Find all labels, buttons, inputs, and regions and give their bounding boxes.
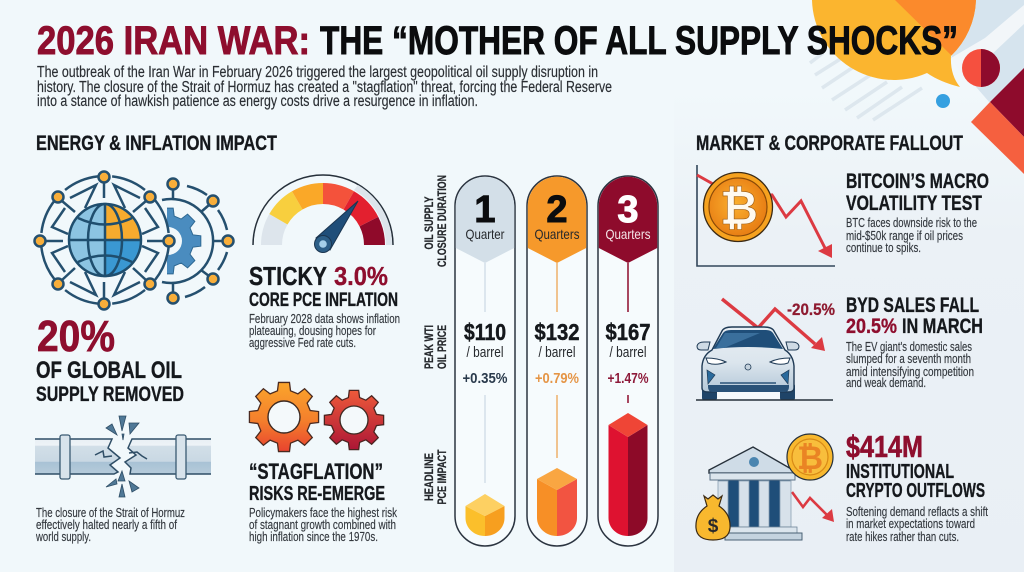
icon: car with falling sales arrow: -20.5% — [787, 300, 835, 319]
stat: 20 percent of global oil supply removed — [36, 312, 184, 406]
row labels: PCE IMPACT — [437, 449, 449, 505]
scenario pill: 1 quarter: Quarter — [466, 226, 505, 242]
scenario pill: 1 quarter — [455, 176, 515, 546]
scenario pill: 1 quarter: +0.35% — [462, 371, 508, 387]
text: institutional crypto outflows: $414M — [846, 429, 923, 464]
title — [37, 19, 958, 63]
text: institutional crypto outflows: in market expectations toward — [846, 516, 975, 531]
icon: bank with bitcoin and money bag — [696, 434, 834, 540]
text: byd sales fall: slumped for a seventh month — [846, 351, 971, 366]
text: strait of hormuz: effectively halted nearly a fifth of — [36, 517, 177, 532]
stat: sticky core PCE inflation: 3.0% — [334, 261, 388, 291]
icon: stagflation gears — [249, 382, 384, 452]
scenario pill: 3 quarters: / barrel — [610, 345, 646, 361]
stat: sticky core PCE inflation: February 2028 data shows inflation — [249, 311, 400, 326]
intro paragraph: The outbreak of the Iran War in February 2026 triggered the largest geopolitical oil supply disruption in — [37, 64, 598, 81]
scenario pill: 1 quarter: 1 — [474, 189, 496, 231]
text: strait of hormuz: The closure of the Strait of Hormuz — [36, 505, 185, 520]
text: byd sales fall: amid intensifying competition — [846, 364, 974, 379]
text: bitcoin macro volatility test: continue to spiks. — [846, 240, 921, 255]
stat: stagflation risks re-emerge: “STAGFLATION” — [249, 459, 383, 484]
text: byd sales fall: and weak demand. — [846, 375, 926, 390]
stat: stagflation risks re-emerge — [249, 459, 397, 544]
heading: energy and inflation impact: ENERGY & INFLATION IMPACT — [36, 132, 277, 155]
scenario pill: 3 quarters: $167 — [606, 319, 650, 345]
title: 2026 IRAN WAR: — [37, 19, 310, 63]
scenario pill: 3 quarters: 3 — [617, 189, 639, 231]
stat: sticky core PCE inflation: aggressive Fed rate cuts. — [249, 335, 356, 350]
decorative corner shapes — [810, 0, 1024, 174]
scenario pill: 3 quarters — [598, 176, 658, 546]
scenario pill: 2 quarters: $132 — [534, 319, 580, 345]
stat: 20 percent of global oil supply removed: OF GLOBAL OIL — [36, 357, 182, 384]
stat: sticky core PCE inflation: CORE PCE INFLATION — [249, 290, 398, 311]
scenario pill: 2 quarters: +0.79% — [535, 371, 579, 387]
intro paragraph: into a stance of hawkish patience as energy costs drive a resurgence in inflation. — [37, 93, 478, 110]
scenario pill: 1 quarter: / barrel — [466, 345, 504, 361]
text: bitcoin macro volatility test: VOLATILITY TEST — [846, 192, 982, 215]
scenario pill: 3 quarters: Quarters — [606, 226, 650, 242]
intro paragraph: history. The closure of the Strait of Hormuz has created a "stagflation" threat, forcing the Federal Reserve — [37, 79, 612, 96]
row labels: PEAK WTI — [424, 325, 436, 369]
text: bitcoin macro volatility test: BTC faces downside risk to the — [846, 215, 977, 230]
icon: bitcoin falling chart — [697, 165, 835, 266]
icon: car with falling sales arrow — [696, 299, 835, 400]
scenario pill: 2 quarters: 2 — [546, 189, 568, 231]
icon: inflation gauge — [253, 175, 393, 252]
row labels — [424, 175, 449, 504]
scenario pill: 2 quarters: Quarters — [534, 226, 580, 242]
icon: broken pipeline — [35, 416, 211, 497]
icon: bank with bitcoin and money bag: $ — [708, 516, 719, 537]
icon: bitcoin falling chart: ₿ — [720, 181, 758, 234]
row labels: OIL SUPPLY — [424, 196, 436, 250]
text: byd sales fall: 20.5% — [846, 315, 897, 338]
stat: sticky core PCE inflation — [249, 261, 400, 350]
stat: 20 percent of global oil supply removed: 20% — [37, 312, 115, 361]
stat: stagflation risks re-emerge: high inflation since the 1970s. — [249, 529, 378, 544]
stat: sticky core PCE inflation: plateauing, dousing hopes for — [249, 323, 376, 338]
scenario pill: 2 quarters: / barrel — [538, 345, 576, 361]
scenario pill: 3 quarters: +1.47% — [608, 371, 649, 387]
icon: globe and gear network — [34, 172, 234, 310]
text: institutional crypto outflows: rate hikes rather than cuts. — [846, 529, 959, 544]
text: institutional crypto outflows: INSTITUTIONAL — [846, 461, 954, 483]
row labels: HEADLINE — [424, 453, 436, 501]
icon: bank with bitcoin and money bag: ₿ — [797, 440, 823, 476]
text: strait of hormuz: world supply. — [35, 529, 91, 544]
text: byd sales fall: IN MARCH — [902, 315, 983, 338]
stat: 20 percent of global oil supply removed: SUPPLY REMOVED — [36, 383, 184, 406]
right column background panel — [674, 90, 1024, 572]
text: bitcoin macro volatility test: mid-$50k range if oil prices — [846, 228, 963, 243]
text: institutional crypto outflows — [846, 429, 988, 544]
stat: sticky core PCE inflation: STICKY — [249, 261, 327, 291]
text: byd sales fall: The EV giant's domestic sales — [846, 339, 972, 354]
text: byd sales fall — [846, 294, 983, 390]
text: strait of hormuz — [35, 505, 185, 544]
text: bitcoin macro volatility test — [846, 170, 989, 255]
intro paragraph — [37, 64, 612, 110]
scenario pill: 1 quarter: $110 — [464, 319, 506, 345]
row labels: CLOSURE DURATION — [437, 175, 449, 267]
text: byd sales fall: BYD SALES FALL — [846, 294, 979, 317]
row labels: OIL PRICE — [437, 325, 449, 369]
stat: stagflation risks re-emerge: RISKS RE-EMERGE — [249, 483, 385, 505]
scenario pill: 2 quarters — [527, 176, 587, 546]
stat: stagflation risks re-emerge: Policymakers face the highest risk — [249, 505, 397, 520]
stat: stagflation risks re-emerge: of stagnant growth combined with — [249, 517, 396, 532]
